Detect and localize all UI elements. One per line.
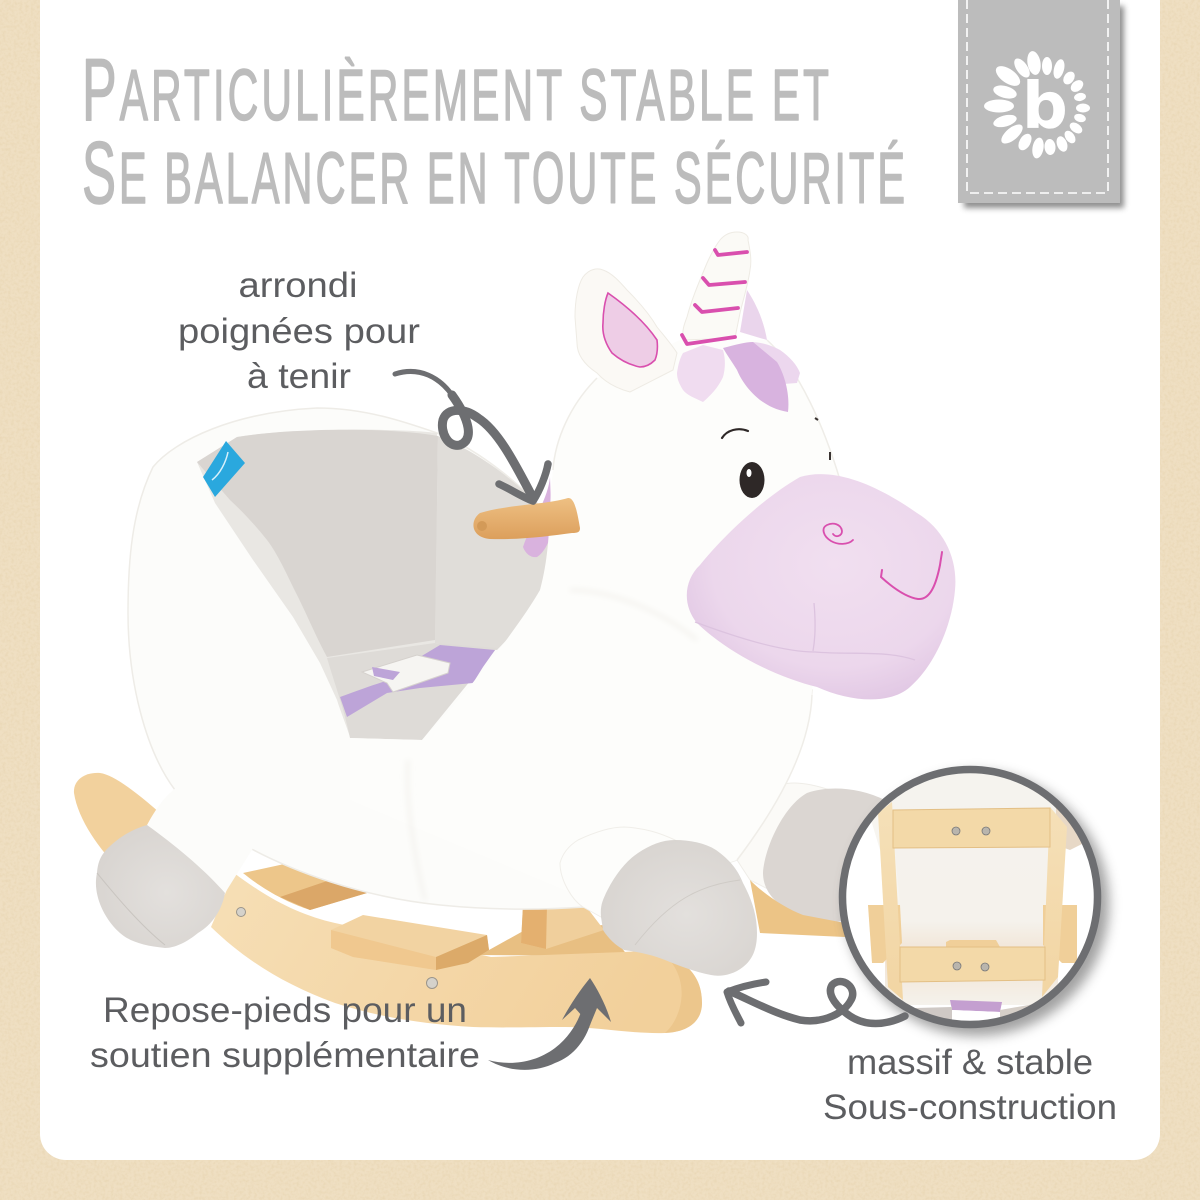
back cushion panel — [197, 430, 438, 657]
top cross bar — [893, 808, 1050, 848]
footrest — [331, 915, 489, 970]
right interior panel — [435, 436, 560, 650]
label: footrest — [90, 991, 480, 1075]
muzzle — [687, 474, 955, 699]
far rocker segment — [750, 880, 845, 937]
label: under-construction: massif & stable — [847, 1043, 1093, 1082]
lower cross bar — [900, 947, 1045, 982]
lens ring — [842, 770, 1098, 1024]
rocking unicorn — [74, 232, 955, 1033]
front body and head — [350, 340, 840, 905]
body shell — [128, 408, 812, 909]
wooden handle — [473, 498, 580, 539]
front leg and foot — [560, 827, 757, 976]
middle wooden block — [521, 905, 604, 949]
small footrest tab — [946, 940, 1000, 947]
rocker end grain — [665, 958, 702, 1033]
seat interior — [197, 430, 560, 740]
arrow: to handle — [395, 371, 548, 501]
arrow: to footrest — [488, 978, 611, 1070]
eyebrow — [722, 429, 748, 438]
purple strap — [950, 1000, 1002, 1012]
grey feet at lens bottom — [916, 1007, 952, 1020]
label: handles: poignées pour — [178, 312, 420, 351]
nostril spiral — [824, 524, 853, 544]
main rocker — [211, 873, 702, 1033]
lens interior: underside of rocker — [868, 773, 1082, 1020]
logo flower petals — [984, 50, 1090, 159]
rear cross bar — [243, 863, 367, 910]
callout: footrest — [90, 978, 611, 1075]
harness buckle — [362, 655, 450, 692]
far ear — [740, 290, 767, 340]
inner face of rocker — [480, 925, 628, 956]
interior side wall — [197, 430, 438, 737]
lavender mane behind handle — [523, 477, 552, 557]
label: footrest: Repose-pieds pour un — [103, 991, 467, 1030]
label: footrest: soutien supplémentaire — [90, 1036, 480, 1075]
brand tag logo — [958, 0, 1124, 208]
far rear leg — [737, 783, 885, 922]
label: handles: arrondi — [238, 266, 358, 305]
muzzle seams — [695, 603, 915, 660]
detail lens — [842, 765, 1109, 1036]
bar screws — [952, 827, 990, 971]
eye — [740, 462, 764, 498]
rear leg and foot — [96, 785, 255, 948]
callout: under-construction — [727, 981, 1117, 1127]
back rocker tip — [74, 773, 170, 870]
callout: handles — [178, 266, 548, 501]
forelock — [677, 342, 800, 412]
harness strap — [340, 645, 495, 717]
logo letter b: b — [1022, 70, 1068, 144]
horn — [682, 232, 751, 344]
side skids — [868, 905, 902, 963]
label: under-construction — [823, 1043, 1117, 1127]
blue label — [203, 441, 245, 497]
screws — [236, 908, 438, 988]
soft body shading — [407, 590, 697, 900]
smile — [881, 552, 942, 599]
arrow: to base — [727, 981, 905, 1024]
label: handles: à tenir — [247, 357, 351, 396]
label: handles — [178, 266, 420, 396]
seat cushion — [327, 643, 497, 740]
title — [82, 40, 908, 222]
side rails — [878, 802, 903, 1000]
label: under-construction: Sous-construction — [823, 1088, 1117, 1127]
far eye hints — [815, 418, 830, 460]
near ear — [575, 269, 677, 392]
head edge shading — [553, 340, 840, 860]
